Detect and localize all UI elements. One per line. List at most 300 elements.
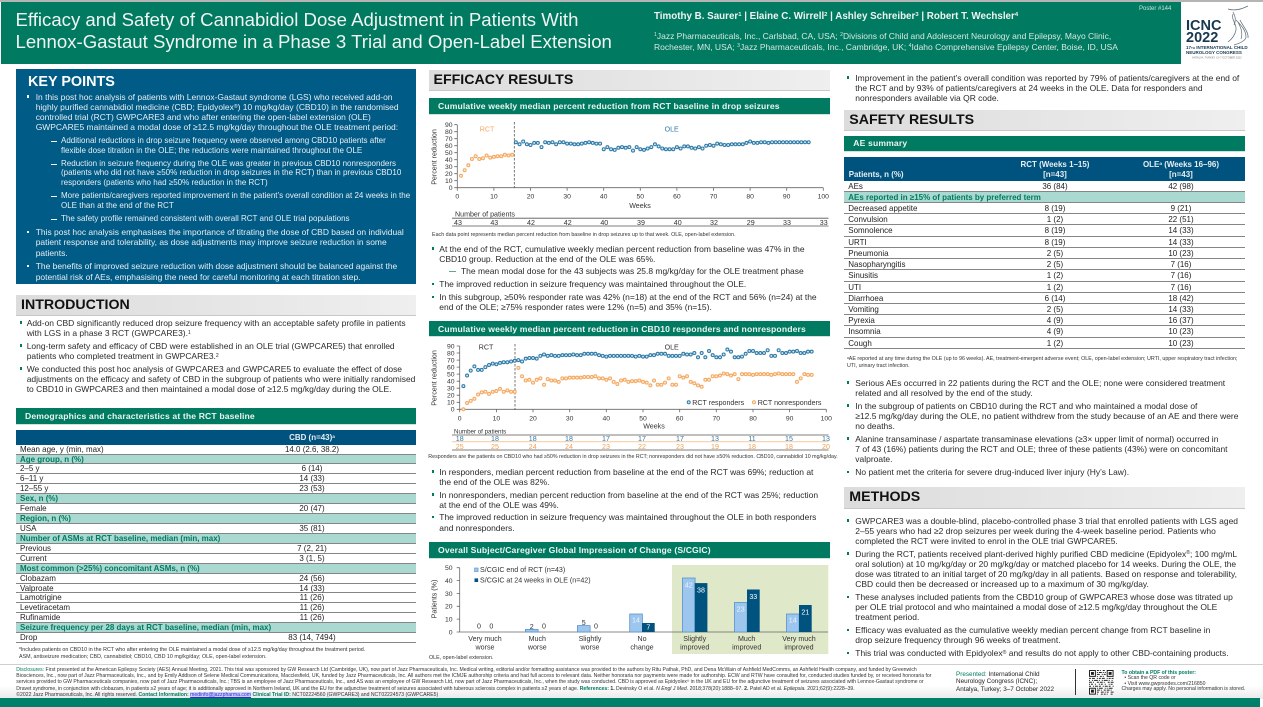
chart: responders and nonresponders: Percent reduction — [430, 350, 438, 406]
bar chart: S/CGIC: 0 — [477, 623, 481, 631]
number of patients rows: chart 2: 18 — [529, 435, 537, 443]
heading bar: demographics — [16, 408, 416, 425]
methods bullets: drop seizure frequency through 96 weeks of treatment. — [855, 635, 1061, 645]
table: demographics: 23 (53) — [299, 484, 325, 493]
footnote: AE table: UTI, urinary tract infection. — [847, 363, 910, 369]
introduction bullets: Add-on CBD significantly reduced drop seizure frequency with an acceptable safety profile in patients — [27, 318, 406, 328]
chart: responders and nonresponders: Weeks — [643, 423, 665, 431]
methods bullets: 2–55 years who had ≥2 drop seizures per week during the 4-week baseline period. Patients who — [855, 526, 1216, 536]
table: demographics: USA — [20, 524, 36, 533]
bar chart: S/CGIC: 14 — [789, 617, 797, 625]
table: AE summary: 42 (98) — [1168, 182, 1194, 191]
table: demographics: Seizure frequency per 28 days at RCT baseline, median (min, max) — [20, 623, 271, 632]
bar chart: S/CGIC: 7 — [646, 623, 650, 631]
title: Efficacy and Safety of Cannabidiol Dose Adjustment in Patients With — [16, 8, 578, 30]
chart: cumulative reduction in drop seizures: 70 — [445, 136, 453, 143]
chart: cumulative reduction in drop seizures: OLE — [665, 126, 679, 134]
table: demographics: Drop — [20, 633, 37, 642]
number of patients rows: chart 2: 24 — [565, 443, 573, 451]
heading: methods — [844, 487, 1245, 509]
table: demographics: 24 (56) — [299, 574, 325, 583]
methods bullets: Efficacy was evaluated as the cumulative weekly median percent change from RCT baseline in — [855, 625, 1210, 635]
table: AE summary: 14 (33) — [1168, 226, 1194, 235]
number of patients rows: chart 2: 17 — [602, 435, 610, 443]
bar chart: S/CGIC: Patients (%) — [430, 580, 438, 618]
table: AE summary: Pyrexia — [848, 316, 875, 325]
chart: responders and nonresponders: OLE — [665, 343, 679, 351]
number of patients rows: chart 2: 18 — [456, 435, 464, 443]
chart 2 bullets: In responders, median percent reduction from baseline at the end of the RCT was 69%; reduction at — [439, 467, 813, 477]
key points list: The benefits of improved seizure reduction with dose adjustment should be balanced against the — [36, 261, 397, 271]
affiliations: 1Jazz Pharmaceuticals, Inc., Carlsbad, CA, USA; 2Divisions of Child and Adolescent Neurology and Epilepsy, Mayo Clinic, — [654, 30, 1111, 40]
safety bullets: ≥12.5 mg/kg/day during the OLE, no patient withdrew from the study because of an AE and there were — [855, 411, 1238, 421]
title: Lennox-Gastaut Syndrome in a Phase 3 Trial and Open-Label Extension — [16, 31, 612, 52]
bar chart: S/CGIC: worse — [580, 644, 600, 652]
table: AE summary: 1 (2) — [1047, 271, 1063, 280]
chart: cumulative reduction in drop seizures: 70 — [710, 194, 717, 200]
table: AE summary: 1 (2) — [1047, 283, 1063, 292]
bar chart: S/CGIC: Slightly — [579, 635, 602, 643]
table: demographics: Female — [20, 504, 47, 513]
methods bullets: oral solution) at 10 mg/kg/day or 20 mg/kg/day or matched placebo for 14 weeks. During the OLE, the — [855, 559, 1236, 569]
S/CGIC bullet — [847, 73, 1240, 103]
table: demographics: Region, n (%) — [20, 514, 71, 523]
footnote: AE table — [847, 356, 1238, 369]
QR instructions: • Visit www.gwprsodes.com/216850 — [1124, 681, 1206, 687]
bar chart: S/CGIC: change — [630, 644, 654, 652]
introduction bullets: to CBD10 in GWPCARE3 and then maintained a modal dose of ≥12.5 mg/kg/day during the OLE. — [27, 384, 391, 394]
table: AE summary: URTI — [848, 238, 867, 247]
logo: ICNC 2022: ANTALYA, TURKEY | 3–7 OCTOBER 2022 — [1192, 56, 1242, 60]
table: AE summary: Nasopharyngitis — [848, 260, 905, 269]
table: AE summary: 2 (5) — [1047, 249, 1063, 258]
panel: key points — [16, 69, 416, 284]
footer green bar — [0, 698, 1260, 707]
key points list: controlled trial (RCT) GWPCARE3 and who after entering the open-label extension (OLE) — [36, 112, 371, 122]
footer disclosures: Biosciences, Inc., now part of Jazz Pharmaceuticals, Inc., and by Emily Addison of Selene Medical Communications, Macclesfield, UK, funded by Jazz Pharmaceuticals, Inc. All authors met the ICMJE authorship criteria and had full access to relevant data. Neither honoraria nor payments were made for authorship. ECW and RTW have consulted for, conducted studies funded by, or received honoraria for — [16, 673, 931, 679]
table: AE summary: 8 (19) — [1045, 238, 1065, 247]
bar chart: S/CGIC: improved — [732, 644, 761, 652]
chart: responders and nonresponders: 40 — [603, 415, 610, 422]
chart 1 bullets: The mean modal dose for the 43 subjects was 25.8 mg/kg/day for the OLE treatment phase — [461, 266, 804, 276]
table: demographics: 14.0 (2.6, 38.2) — [285, 445, 339, 454]
number of patients row: chart 1: 40 — [600, 219, 608, 227]
number of patients row: chart 1: 43 — [454, 219, 462, 227]
footnote: demographics: ASM, antiseizure medication; CBD, cannabidiol; CBD10, CBD 10 mg/kg/day; OLE, open-label extension. — [19, 654, 266, 660]
table: demographics: 11 (26) — [300, 603, 324, 612]
table: demographics: 11 (26) — [300, 593, 324, 602]
table: demographics: 11 (26) — [300, 613, 324, 622]
bar chart: S/CGIC: 38 — [697, 587, 705, 595]
table: AE summary: Sinusitis — [848, 271, 878, 280]
QR instructions: Charges may apply. No personal information is stored. — [1122, 686, 1245, 692]
chart 2 bullets: The improved reduction in seizure frequency was maintained throughout the OLE in both responders — [439, 512, 816, 522]
chart: responders and nonresponders: 60 — [676, 415, 684, 422]
table: AE summary: 7 (16) — [1171, 283, 1191, 292]
bar chart: S/CGIC: 40 — [445, 578, 453, 585]
table: demographics: 14 (33) — [299, 584, 325, 592]
key points list: potential risk of AEs, emphasising the need for careful monitoring at each titration step. — [36, 272, 361, 282]
chart: responders and nonresponders: RCT responders — [692, 399, 745, 407]
bar chart: S/CGIC: worse — [527, 644, 547, 652]
number of patients rows: chart 2: 17 — [676, 435, 684, 443]
chart: responders and nonresponders: 30 — [566, 415, 574, 422]
key points list: More patients/caregivers reported improvement in the patient’s overall condition at 24 weeks in the — [61, 191, 410, 200]
key points list: In this post hoc analysis of patients with Lennox-Gastaut syndrome (LGS) who received add-on — [36, 92, 393, 102]
chart: responders and nonresponders: 50 — [639, 415, 647, 422]
logo: ICNC 2022: NEUROLOGY CONGRESS — [1186, 50, 1242, 55]
bar chart: S/CGIC: Very much — [468, 635, 502, 643]
table: AE summary: 16 (37) — [1168, 316, 1194, 325]
heading bar: chart 2 — [428, 321, 830, 337]
number of patients row: chart 1: 33 — [783, 219, 791, 227]
safety bullets: no deaths. — [855, 421, 895, 431]
table: AE summary: UTI — [848, 283, 861, 292]
bar chart: S/CGIC: improved — [680, 644, 709, 652]
heading bar: S/CGIC — [428, 542, 830, 558]
bar chart: S/CGIC — [430, 565, 828, 654]
chart 1 bullets: In this subgroup, ≥50% responder rate was 42% (n=18) at the end of the RCT and 56% (n=24) at the — [439, 292, 817, 302]
bar chart: S/CGIC: 23 — [737, 606, 745, 614]
key points list: flexible dose titration in the OLE; the reductions were maintained throughout the OLE — [61, 146, 362, 155]
number of patients rows: chart 2: Number of patients — [454, 428, 506, 436]
bar chart: S/CGIC: 50 — [445, 565, 453, 572]
bar chart: S/CGIC: Much — [738, 635, 755, 643]
methods bullets: dose was titrated to an initial target of 20 mg/kg/day in all patients. Based on response and tolerability, — [855, 569, 1237, 579]
table: AE summary: 22 (51) — [1168, 215, 1194, 224]
S/CGIC bullet: the RCT and by 93% of patients/caregivers at 24 weeks in the OLE. Data for responders and — [855, 83, 1203, 93]
table: demographics — [16, 430, 416, 643]
table: AE summary: 4 (9) — [1047, 327, 1063, 336]
table: AE summary: 2 (5) — [1047, 305, 1063, 314]
chart: responders and nonresponders: RCT nonresponders — [758, 399, 822, 407]
number of patients rows: chart 2: 11 — [748, 435, 756, 443]
chart: cumulative reduction in drop seizures: 90 — [445, 122, 453, 129]
presented at: Presented: International Child — [956, 670, 1040, 678]
bar chart: S/CGIC: S/CGIC at 24 weeks in OLE (n=42) — [480, 577, 591, 585]
chart: responders and nonresponders: 70 — [447, 358, 455, 364]
methods bullets: CBD could then be decreased or increased up to a maximum of 30 mg/kg/day. — [855, 579, 1149, 589]
heading: safety results: SAFETY RESULTS — [849, 112, 974, 128]
methods bullets: per OLE trial protocol and who maintained a modal dose of ≥12.5 mg/kg/day throughout the OLE — [855, 602, 1217, 612]
table: demographics: Rufinamide — [20, 613, 60, 622]
bar chart: S/CGIC: 10 — [445, 616, 453, 624]
table: AE summary: 8 (19) — [1045, 226, 1065, 235]
table: AE summary — [844, 157, 1245, 349]
chart: cumulative reduction in drop seizures: 40 — [445, 157, 453, 164]
chart 2 bullets: and nonresponders. — [439, 523, 515, 533]
heading bar: chart 1: Cumulative weekly median percent reduction from RCT baseline in drop seizures — [438, 101, 780, 111]
number of patients row: chart 1: 40 — [674, 219, 682, 227]
key points list: The safety profile remained consistent with overall RCT and OLE trial populations — [61, 214, 350, 223]
logo: ICNC 2022: 17TH INTERNATIONAL CHILD — [1186, 45, 1248, 50]
key points list: This post hoc analysis emphasises the importance of titrating the dose of CBD based on individual — [36, 227, 404, 237]
heading: efficacy results — [428, 70, 830, 91]
methods bullets: These analyses included patients from the CBD10 group of GWPCARE3 whose dose was titrated up — [855, 592, 1233, 602]
affiliations: Rochester, MN, USA; 3Jazz Pharmaceuticals, Inc., Cambridge, UK; 4Idaho Comprehensive Epilepsy Center, Boise, ID, USA — [654, 42, 1118, 52]
bar chart: S/CGIC: 0 — [489, 623, 493, 631]
QR instructions — [1122, 670, 1245, 692]
footer disclosures: Disclosures: First presented at the American Epilepsy Society (AES) Annual Meeting, 2021. This trial was sponsored by GW Research Ltd (Cambridge, UK), now part of Jazz Pharmaceuticals, Inc. Medical writing, editorial and/or formatting assistance was provided to the authors by Ritu Pathak, PhD, and Dena McWain of Ashfield MedComms, an Ashfield Health company, and funded by Greenwich — [16, 667, 917, 673]
table: demographics: Current — [20, 554, 47, 563]
safety bullets: 7 of 43 (16%) patients during the RCT and OLE; three of these patients (43%) were on concomitant — [855, 444, 1228, 454]
chart 1 bullets: end of the OLE; ≥75% responder rates were 12% (n=5) and 35% (n=15). — [439, 302, 712, 312]
footnote: demographics: aIncludes patients on CBD10 in the RCT who after entering the OLE maintained a modal dose of ≥12.5 mg/kg/day throughout the treatment period. — [19, 646, 365, 652]
table: AE summary: AEs — [848, 182, 863, 191]
chart: responders and nonresponders: 20 — [529, 415, 537, 422]
table: AE summary: Pneumonia — [848, 249, 889, 258]
QR instructions: To obtain a PDF of this poster: — [1122, 670, 1196, 676]
table header — [16, 430, 416, 445]
table: AE summary: 1 (2) — [1047, 339, 1063, 348]
affiliations — [654, 30, 1118, 52]
methods bullets: This trial was conducted with Epidyolex® and results do not apply to other CBD-containing products. — [855, 648, 1229, 658]
number of patients row: chart 1: 32 — [710, 219, 718, 227]
table: demographics: Mean age, y (min, max) — [20, 445, 104, 454]
safety bullets: In the subgroup of patients on CBD10 during the RCT and who maintained a modal dose of — [855, 401, 1197, 411]
table: demographics: 12–55 y — [20, 484, 48, 493]
methods bullets: During the RCT, patients received plant-derived highly purified CBD medicine (Epidyolex®; 100 mg/mL — [855, 549, 1237, 559]
table: AE summary: Convulsion — [848, 215, 888, 224]
number of patients row: chart 1: 29 — [747, 219, 755, 227]
chart: responders and nonresponders: RCT — [479, 343, 494, 351]
footer band — [0, 664, 1263, 698]
number of patients rows: chart 2: 18 — [491, 435, 499, 443]
chart: responders and nonresponders: 60 — [447, 364, 455, 372]
number of patients rows: chart 2: 23 — [602, 443, 610, 451]
safety bullets: Alanine transaminase / aspartate transaminase elevations (≥3× upper limit of normal) occurred in — [855, 434, 1218, 444]
introduction bullets: with LGS in a phase 3 RCT (GWPCARE3).1 — [27, 328, 191, 338]
chart: cumulative reduction in drop seizures: 90 — [783, 194, 791, 200]
footnote: AE table: aAE reported at any time during the OLE (up to 96 weeks). AE, treatment-emergent adverse event; OLE, open-label extension; URTI, upper respiratory tract infection; — [847, 356, 1238, 362]
bar chart: S/CGIC: 2 — [530, 623, 534, 631]
table: demographics: Age group, n (%) — [20, 455, 84, 464]
bar chart: S/CGIC: 0 — [542, 623, 546, 631]
AE table header: [n=43] — [1169, 170, 1193, 179]
table: AE summary: 9 (21) — [1171, 204, 1191, 213]
footer disclosures: ©2022 Jazz Pharmaceuticals, Inc. All rights reserved. Contact Information: medinfo@jazzpharma.com Clinical Trial ID: NCT02224560 (GWPCARE3) and NCT02224573 (GWPCARE5) — [16, 692, 438, 698]
heading: introduction: INTRODUCTION — [21, 297, 130, 313]
table: demographics: Sex, n (%) — [20, 494, 58, 503]
chart: cumulative reduction in drop seizures: Weeks — [629, 202, 651, 210]
table: AE summary: 6 (14) — [1045, 294, 1065, 303]
logo: ICNC 2022 — [1186, 6, 1248, 60]
table: demographics: Valproate — [20, 584, 54, 592]
table: demographics: Lamotrigine — [20, 593, 62, 602]
heading: safety results — [844, 110, 1245, 131]
bar chart: S/CGIC: 5 — [582, 619, 586, 627]
introduction bullets: Long-term safety and efficacy of CBD were established in an OLE trial (GWPCARE5) that enrolled — [27, 341, 395, 351]
chart: cumulative reduction in drop seizures — [430, 122, 829, 210]
table: AE summary: 1 (2) — [1047, 215, 1063, 224]
table: demographics: 2–5 y — [20, 464, 40, 473]
introduction bullets — [20, 318, 415, 394]
footer disclosures: Dravet syndrome, in conjunction with clobazam, in patients ≥2 years of age; it is additionally approved in Northern Ireland, UK and the EU for the adjunctive treatment of seizures associated with tuberous sclerosis complex in patients ≥2 years of age. References: 1. Devinsky O et al. N Engl J Med. 2018;378(20):1888–97. 2. Patel AD et al. Epilepsia. 2021;62(9):2228–39. — [16, 686, 855, 692]
chart: cumulative reduction in drop seizures: 10 — [445, 178, 453, 185]
key points list: highly purified cannabidiol medicine (CBD; Epidyolex®) 10 mg/kg/day (CBD10) in the randomised — [36, 102, 399, 112]
number of patients rows: chart 2: 13 — [711, 435, 719, 443]
table: demographics: 14 (33) — [299, 474, 325, 483]
safety bullets — [847, 378, 1238, 477]
table: AE summary: 7 (16) — [1171, 260, 1191, 269]
key points list: patients. — [36, 248, 68, 258]
bar chart: S/CGIC: 0 — [594, 623, 598, 631]
number of patients rows: chart 2 — [452, 428, 830, 451]
logo: ICNC 2022: 2022 — [1186, 30, 1218, 46]
heading: introduction — [16, 295, 416, 316]
authors: Timothy B. Saurer1 | Elaine C. Wirrell2 | Ashley Schreiber3 | Robert T. Wechsler4 — [654, 11, 1018, 22]
AE table header: [n=43] — [1043, 170, 1067, 179]
chart: cumulative reduction in drop seizures: 30 — [563, 194, 571, 200]
chart: responders and nonresponders: 10 — [447, 400, 455, 407]
chart: responders and nonresponders: 100 — [821, 415, 832, 422]
number of patients rows: chart 2: 25 — [491, 443, 499, 451]
chart: responders and nonresponders: 70 — [713, 415, 720, 422]
chart: responders and nonresponders: 80 — [447, 350, 455, 357]
QR instructions: • Scan the QR code or — [1124, 675, 1176, 681]
AE table header: OLEa (Weeks 16–96) — [1143, 160, 1219, 169]
bar chart: S/CGIC: 42 — [685, 581, 693, 589]
key points list: Reduction in seizure frequency during the OLE was greater in previous CBD10 nonresponders — [61, 159, 396, 168]
bar chart: S/CGIC: 30 — [445, 591, 453, 598]
AE table header — [844, 157, 1245, 181]
table: demographics: 7 (2, 21) — [297, 544, 327, 553]
heading bar: demographics: Demographics and characteristics at the RCT baseline — [25, 411, 255, 421]
key points list: GWPCARE5 maintained a modal dose of ≥12.5 mg/kg/day throughout the OLE treatment period: — [36, 122, 398, 132]
methods bullets — [847, 516, 1238, 658]
bar chart: S/CGIC: Much — [529, 635, 546, 643]
introduction bullets: adjustments on the efficacy and safety of CBD in the subgroup of patients who were initially randomised — [27, 374, 415, 384]
chart: responders and nonresponders: 90 — [447, 343, 455, 350]
table: AE summary: 36 (84) — [1042, 182, 1068, 191]
chart: cumulative reduction in drop seizures: Percent reduction — [430, 129, 438, 185]
table: AE summary: 4 (9) — [1047, 316, 1063, 325]
chart: responders and nonresponders: 0 — [451, 407, 455, 414]
S/CGIC bullet: Improvement in the patient’s overall condition was reported by 79% of patients/caregivers at the end of — [855, 73, 1239, 83]
number of patients row: chart 1: 39 — [637, 219, 645, 227]
heading: efficacy results: EFFICACY RESULTS — [434, 72, 573, 88]
table: AE summary: Decreased appetite — [848, 204, 917, 213]
number of patients row: chart 1 — [452, 210, 828, 227]
number of patients row: chart 1: 33 — [820, 219, 828, 227]
key points list: responders (patients who had ≥50% reduction in the RCT) — [61, 178, 268, 187]
table: demographics: 83 (14, 7494) — [288, 633, 336, 642]
table: AE summary: 10 (23) — [1168, 327, 1194, 336]
table: AE summary: 2 (5) — [1047, 260, 1063, 269]
chart: responders and nonresponders — [430, 343, 832, 431]
chart: responders and nonresponders: 20 — [447, 393, 455, 400]
number of patients row: chart 1: 42 — [527, 219, 535, 227]
table: demographics: 6–11 y — [20, 474, 43, 483]
key points list — [27, 92, 410, 282]
chart: cumulative reduction in drop seizures: 10 — [490, 194, 498, 200]
table: demographics: Most common (>25%) concomitant ASMs, n (%) — [20, 564, 200, 573]
methods bullets: treatment period. — [855, 612, 919, 622]
header band — [0, 0, 1263, 64]
presented at — [956, 670, 1054, 693]
key points list: patient response and tolerability, as dose adjustments may improve seizure reduction in some — [36, 237, 387, 247]
AE table header: Patients, n (%) — [849, 170, 904, 179]
number of patients rows: chart 2: 13 — [822, 435, 830, 443]
chart: cumulative reduction in drop seizures: 80 — [746, 194, 754, 200]
bar chart: S/CGIC: improved — [784, 644, 814, 652]
chart: responders and nonresponders: 30 — [447, 386, 455, 393]
number of patients rows: chart 2: 18 — [748, 443, 756, 451]
table: AE summary: AEs reported in ≥15% of patients by preferred term — [848, 193, 1041, 202]
number of patients rows: chart 2: 24 — [529, 443, 537, 451]
table: demographics: Number of ASMs at RCT baseline, median (min, max) — [20, 534, 220, 543]
safety bullets: related and all resolved by the end of the study. — [855, 388, 1033, 398]
heading bar: chart 2: Cumulative weekly median percent reduction in CBD10 responders and nonresponders — [438, 324, 806, 334]
bar chart: S/CGIC: S/CGIC end of RCT (n=43) — [480, 566, 565, 574]
bar chart: S/CGIC: No — [637, 635, 647, 643]
bar chart: S/CGIC: 20 — [445, 604, 453, 611]
introduction bullets: We conducted this post hoc analysis of GWPCARE3 and GWPCARE5 to evaluate the effect of dose — [27, 364, 402, 374]
S/CGIC bullet: nonresponders available via QR code. — [855, 93, 999, 103]
chart: cumulative reduction in drop seizures: 50 — [445, 150, 453, 157]
table: AE summary: Insomnia — [848, 327, 881, 336]
table header: CBD (n=43)a — [289, 433, 335, 442]
chart: cumulative reduction in drop seizures: 0 — [455, 194, 459, 200]
safety bullets: Serious AEs occurred in 22 patients during the RCT and the OLE; none were considered treatment — [855, 378, 1225, 388]
chart: cumulative reduction in drop seizures: 20 — [527, 194, 534, 200]
key points list: (patients who did not have ≥50% reduction in drop seizures in the RCT) than in previous CBD10 — [61, 168, 401, 177]
footer disclosures: services provided to GW Pharmaceuticals companies, now part of Jazz Pharmaceuticals, Inc.; TBS is an employee of Jazz Pharmaceuticals, Inc., and AS was an employee of GW Research Ltd, now part of Jazz Pharmaceuticals, Inc., when the study was conducted. CBD is approved as Epidyolex® in the UK and EU for the adjunctive treatment of seizures associated with Lennox-Gastaut syndrome or — [16, 679, 924, 685]
footer disclosures — [16, 667, 932, 698]
chart: cumulative reduction in drop seizures: 40 — [600, 194, 608, 200]
table: demographics: Levetiracetam — [20, 603, 70, 612]
table: AE summary: 8 (19) — [1045, 204, 1065, 213]
chart 1 bullets: CBD10 group. Reduction at the end of the OLE was 65%. — [439, 254, 655, 264]
number of patients rows: chart 2: 25 — [456, 443, 464, 451]
key points list: Additional reductions in drop seizure frequency were observed among CBD10 patients after — [61, 136, 386, 145]
chart 1 bullets: The improved reduction in seizure frequency was maintained throughout the OLE. — [439, 279, 746, 289]
footnote: demographics — [19, 646, 365, 660]
logo: ICNC 2022: ICNC — [1186, 18, 1222, 34]
footnote: chart 1: Each data point represents median percent reduction from baseline in drop seizures up to that week. OLE, open-label extension. — [432, 232, 736, 238]
table: AE summary: Somnolence — [848, 226, 893, 235]
chart: responders and nonresponders: 0 — [458, 415, 462, 422]
chart 2 bullets: In nonresponders, median percent reduction from baseline at the end of the RCT was 25%; reduction — [439, 490, 818, 500]
table: demographics: 6 (14) — [302, 464, 322, 473]
table: demographics: 3 (1, 5) — [299, 554, 325, 563]
table: demographics: 35 (81) — [299, 524, 325, 533]
chart: cumulative reduction in drop seizures: 0 — [449, 185, 453, 192]
bar chart: S/CGIC: Slightly — [683, 635, 707, 643]
number of patients row: chart 1: Number of patients — [455, 210, 515, 218]
footer divider — [1074, 669, 1077, 695]
chart: cumulative reduction in drop seizures: 60 — [673, 194, 681, 200]
heading bar: chart 1 — [428, 98, 830, 115]
number of patients rows: chart 2: 20 — [822, 443, 830, 451]
chart: cumulative reduction in drop seizures: 100 — [818, 194, 829, 200]
number of patients rows: chart 2: 23 — [676, 443, 684, 451]
key points list: OLE than at the end of the RCT — [61, 201, 174, 210]
chart: responders and nonresponders: 10 — [493, 415, 500, 422]
chart: cumulative reduction in drop seizures: 50 — [637, 194, 644, 200]
table: AE summary: Cough — [848, 339, 872, 348]
chart: cumulative reduction in drop seizures: 20 — [445, 171, 453, 178]
number of patients rows: chart 2: 15 — [785, 435, 793, 443]
number of patients rows: chart 2: 19 — [711, 443, 719, 451]
chart: cumulative reduction in drop seizures: 60 — [445, 143, 453, 150]
bar chart: S/CGIC: 21 — [801, 608, 809, 616]
chart 1 bullets — [432, 244, 817, 312]
safety bullets: No patient met the criteria for severe drug-induced liver injury (Hy’s Law). — [855, 467, 1129, 477]
presented at: Antalya, Turkey; 3–7 October 2022 — [956, 686, 1054, 693]
table: AE summary: 10 (23) — [1168, 249, 1194, 258]
bar chart: S/CGIC: 14 — [632, 617, 640, 625]
